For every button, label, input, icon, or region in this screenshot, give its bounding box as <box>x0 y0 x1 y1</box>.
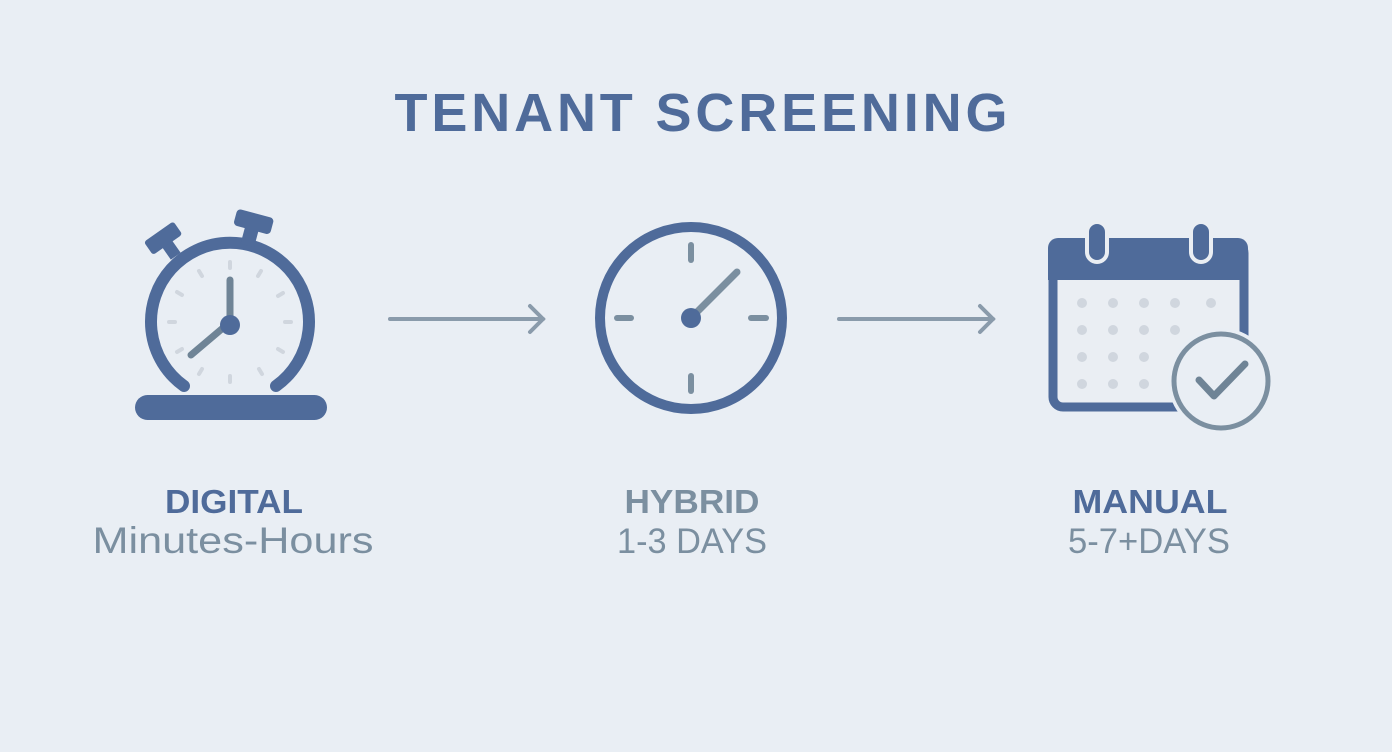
arrow 1 <box>390 306 543 332</box>
label: manual: 5-7+DAYS <box>1068 522 1230 561</box>
icon: clock <box>600 227 782 409</box>
label: hybrid: HYBRID <box>624 483 760 520</box>
label: digital: DIGITAL <box>165 483 303 520</box>
label: hybrid <box>617 483 767 561</box>
title: TENANT SCREENING <box>394 83 1008 143</box>
label: manual: MANUAL <box>1072 483 1228 520</box>
arrow 2 <box>839 306 993 332</box>
icon: stopwatch <box>135 209 327 420</box>
label: hybrid: 1-3 DAYS <box>617 522 767 561</box>
icon: calendar with check <box>1048 222 1274 434</box>
label: manual <box>1068 483 1230 561</box>
label: digital <box>92 483 374 561</box>
label: digital: Minutes-Hours <box>92 520 374 561</box>
